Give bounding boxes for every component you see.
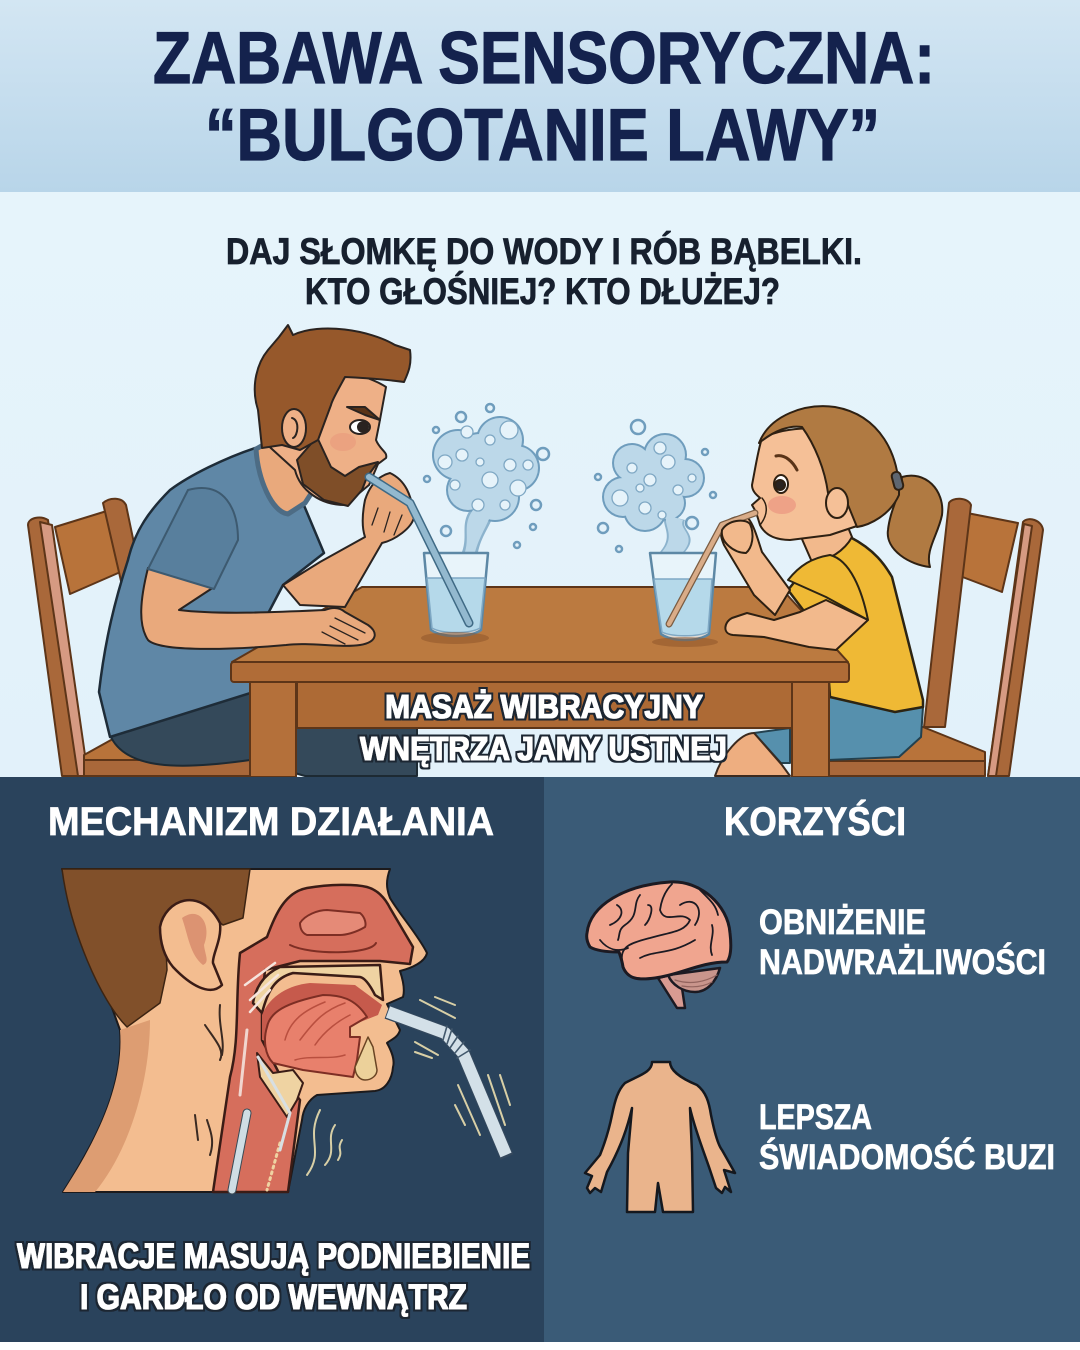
illustration: father and child blowing bubbles at a table (28, 325, 1043, 777)
mechanism caption (17, 1237, 530, 1317)
child: shirt (788, 537, 923, 712)
panel: mechanism (0, 777, 544, 1342)
scene caption: WNĘTRZA JAMY USTNEJ (360, 730, 727, 767)
man: neck (256, 430, 320, 514)
mechanism caption: WIBRACJE MASUJĄ PODNIEBIENIE (17, 1237, 530, 1276)
icon: body (585, 1062, 735, 1212)
icon: brain (587, 882, 731, 1008)
panel: benefits (544, 777, 1080, 1342)
subtitle text (226, 230, 862, 312)
title: ZABAWA SENSORYCZNA: (153, 18, 935, 99)
scene caption: MASAŻ WIBRACYJNY (385, 688, 703, 725)
benefit text: brain (759, 903, 1046, 982)
mechanism caption: I GARDŁO OD WEWNĄTRZ (80, 1278, 467, 1317)
child: resting arm (725, 600, 868, 650)
title: “BULGOTANIE LAWY” (205, 95, 880, 176)
child: raised arm and hand (721, 517, 790, 615)
scene background (0, 192, 1080, 777)
left chair (28, 499, 250, 776)
table (231, 587, 849, 777)
head cross-section (62, 869, 510, 1192)
scene caption (360, 688, 727, 767)
man: shirt (99, 448, 324, 737)
benefit text: brain: NADWRAŻLIWOŚCI (759, 942, 1046, 982)
mechanism heading: MECHANIZM DZIAŁANIA (48, 800, 494, 844)
benefit text: brain: OBNIŻENIE (759, 903, 926, 942)
right chair (828, 499, 1043, 776)
man: resting arm (141, 568, 375, 649)
child: head (752, 406, 904, 540)
child: shorts (754, 697, 923, 763)
left bubbles (424, 404, 549, 552)
title (153, 18, 935, 176)
child: leg (715, 733, 790, 776)
man: shirt sleeve (148, 488, 238, 589)
man: raised arm and hand (283, 473, 414, 607)
child: ponytail (888, 476, 942, 567)
benefit text: body (759, 1098, 1055, 1177)
subtitle text: DAJ SŁOMKĘ DO WODY I RÓB BĄBELKI. (226, 230, 862, 272)
child: neck (798, 520, 852, 562)
vibration marks (307, 997, 510, 1175)
child: sleeve (788, 555, 868, 620)
subtitle text: KTO GŁOŚNIEJ? KTO DŁUŻEJ? (305, 270, 780, 312)
benefit text: body: LEPSZA (759, 1098, 872, 1137)
child: fingers over straw (722, 521, 753, 553)
left glass with straw (369, 477, 489, 644)
header band (0, 0, 1080, 192)
straw (387, 1012, 507, 1157)
benefits heading: KORZYŚCI (724, 798, 906, 844)
man: pants (110, 690, 417, 776)
right glass with straw (650, 513, 755, 647)
man: head (255, 325, 411, 506)
right bubbles (595, 420, 716, 552)
